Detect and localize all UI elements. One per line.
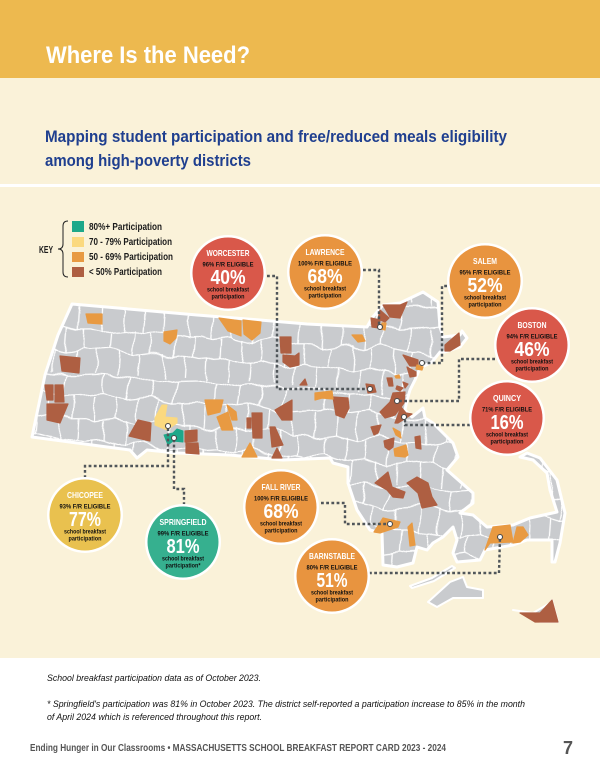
bubble: Chicopee: 93% F/R ELIGIBLE: [60, 504, 111, 510]
bubble: Salem: participation: [468, 302, 502, 308]
bubble: Lawrence: LAWRENCE: [306, 247, 345, 257]
subtitle heading: [45, 127, 507, 170]
footer line: Ending Hunger in Our Classrooms • MASSACHUSETTS SCHOOL BREAKFAST REPORT CARD 2023 - 2024: [30, 742, 446, 754]
cream panel: [0, 78, 600, 658]
bubble: Worcester: school breakfast: [207, 286, 250, 294]
footnotes: * Springfield's participation was 81% in October 2023. The district self-reported a participation increase to 85% in the month: [47, 699, 525, 710]
bubble: Fall River: 100% F/R ELIGIBLE: [254, 496, 308, 502]
legend key: 80%+ Participation: [89, 221, 162, 233]
bubble: Boston: 94% F/R ELIGIBLE: [506, 334, 558, 340]
legend key: [39, 221, 173, 278]
footnotes: of April 2024 which is referenced throughout this report.: [47, 712, 262, 723]
page number: 7: [563, 738, 573, 758]
Springfield district: [164, 429, 183, 445]
bubble: Fall River: 68%: [264, 501, 299, 523]
bubble: Boston: school breakfast: [511, 358, 554, 366]
bubble: Chicopee: school breakfast: [64, 528, 107, 536]
legend key: 70 - 79% Participation: [89, 236, 172, 248]
legend key: KEY: [39, 244, 53, 256]
bubble: Fall River: school breakfast: [260, 520, 303, 528]
bubble: Springfield: 99% F/R ELIGIBLE: [158, 530, 209, 538]
bubble: Quincy: participation: [490, 438, 524, 446]
bubble: Springfield: [145, 504, 221, 580]
bubble: Boston: BOSTON: [518, 320, 546, 330]
bubble: Boston: [494, 307, 570, 383]
header band: [0, 0, 600, 78]
bubble: Lawrence: [287, 234, 363, 310]
subtitle heading: Mapping student participation and free/reduced meals eligibility: [45, 127, 507, 146]
Chicopee district: [155, 405, 177, 430]
bubble: Worcester: [190, 235, 266, 311]
bubble: Worcester: 40%: [210, 267, 246, 289]
bubble: Springfield: participation*: [166, 562, 201, 570]
bubble: Boston: participation: [516, 366, 548, 372]
bubble: Quincy: 71% F/R ELIGIBLE: [482, 406, 532, 414]
bubble: Fall River: FALL RIVER: [262, 482, 300, 492]
footnotes: School breakfast participation data as of October 2023.: [47, 673, 261, 684]
subtitle heading: among high-poverty districts: [45, 151, 251, 170]
town borders: [34, 299, 562, 565]
bubble: Chicopee: [47, 477, 123, 553]
mid participation districts (orange): [86, 314, 528, 550]
bubble: Barnstable: school breakfast: [311, 590, 354, 596]
bubble: Barnstable: 80% F/R ELIGIBLE: [306, 564, 358, 572]
bubble: Barnstable: BARNSTABLE: [309, 551, 355, 561]
low participation districts (brown): [45, 302, 558, 622]
bubble: Salem: 52%: [468, 275, 503, 297]
bubble: Lawrence: 68%: [308, 266, 343, 288]
bubble: Fall River: [243, 469, 319, 545]
footnotes: [47, 673, 525, 723]
bubble: Quincy: QUINCY: [493, 393, 521, 403]
legend key: < 50% Participation: [89, 266, 162, 278]
location pins: [166, 324, 502, 540]
bubble: Chicopee: participation: [68, 536, 102, 542]
bubble: Springfield: 81%: [166, 536, 200, 558]
bubble: Salem: school breakfast: [464, 294, 507, 302]
bubble: Chicopee: CHICOPEE: [67, 490, 103, 500]
bubble: Barnstable: 51%: [316, 570, 348, 592]
bubble: Worcester: participation: [212, 294, 244, 300]
bubble: Worcester: 96% F/R ELIGIBLE: [202, 262, 254, 268]
bubble: Lawrence: school breakfast: [304, 286, 347, 292]
bubble: Salem: 95% F/R ELIGIBLE: [460, 270, 511, 276]
bubble: Barnstable: participation: [316, 596, 348, 604]
bubble: Chicopee: 77%: [69, 509, 101, 531]
connectors: [85, 270, 500, 573]
bubble: Quincy: school breakfast: [486, 432, 529, 438]
state fill: [32, 292, 565, 567]
bubble: Lawrence: 100% F/R ELIGIBLE: [298, 260, 352, 268]
bubble: Springfield: SPRINGFIELD: [160, 517, 206, 527]
bubble: Worcester: WORCESTER: [206, 248, 250, 258]
bubble: Boston: 46%: [514, 339, 550, 361]
Massachusetts map: [30, 290, 566, 623]
bubble: Springfield: school breakfast: [162, 556, 205, 562]
bubble: Salem: SALEM: [473, 256, 497, 266]
legend key: 50 - 69% Participation: [89, 251, 173, 263]
bubble: Lawrence: participation: [308, 292, 342, 300]
bubble: Salem: [447, 243, 523, 319]
bubble: Quincy: [469, 380, 545, 456]
title: Where Is the Need?: [46, 42, 250, 69]
bubble: Fall River: participation: [264, 528, 298, 534]
bubble: Barnstable: [294, 538, 370, 614]
bubble: Quincy: 16%: [490, 412, 524, 434]
islands: [410, 566, 558, 622]
